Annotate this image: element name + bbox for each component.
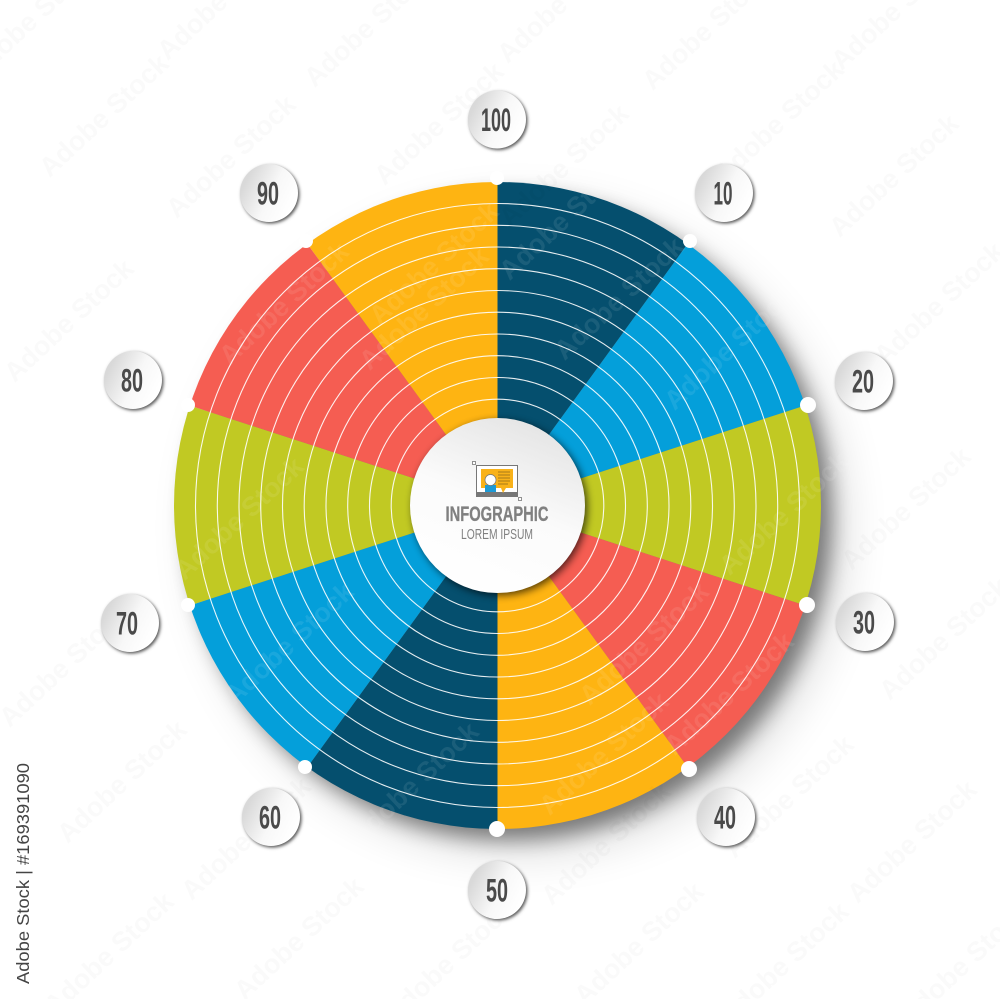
scale label 30: 30 bbox=[853, 604, 875, 640]
concentric ring lines bbox=[196, 204, 800, 808]
watermark pattern: Adobe Stock bbox=[353, 241, 495, 376]
watermark pattern: Adobe Stock bbox=[363, 196, 505, 331]
watermark pattern: Adobe Stock bbox=[218, 576, 360, 711]
segment 30-40: red bbox=[549, 532, 803, 763]
scale label 100: 100 bbox=[481, 102, 511, 138]
scale label 30 bbox=[836, 593, 896, 652]
hub subtitle: LOREM IPSUM bbox=[461, 526, 533, 543]
marker dots on rim bbox=[181, 171, 816, 837]
segment 20-30: green bbox=[580, 407, 821, 604]
wheel drop shadow bbox=[188, 196, 845, 853]
scale label 20: 20 bbox=[852, 364, 874, 400]
scale label 80 bbox=[104, 351, 164, 410]
watermark pattern on white: Adobe Stock bbox=[175, 771, 317, 906]
watermark pattern bbox=[168, 151, 855, 851]
icon: presenter on laptop screen bbox=[472, 462, 522, 500]
scale label 90: 90 bbox=[257, 176, 279, 212]
segment 10-20: blue bbox=[549, 246, 803, 478]
segment 80-90: red bbox=[192, 247, 446, 478]
watermark pattern: Adobe Stock bbox=[713, 446, 855, 581]
watermark pattern on white: Adobe Stock bbox=[0, 253, 140, 388]
watermark pattern: Adobe Stock bbox=[168, 451, 310, 586]
watermark pattern on white: Adobe Stock bbox=[718, 729, 860, 864]
scale label 70 bbox=[101, 594, 160, 654]
watermark pattern on white: Adobe Stock bbox=[823, 108, 965, 243]
center hub bbox=[410, 418, 588, 596]
scale label 70: 70 bbox=[116, 606, 138, 642]
watermark pattern on white: Adobe Stock bbox=[841, 774, 983, 909]
scale label 60 bbox=[242, 788, 302, 848]
watermark pattern on white: Adobe Stock bbox=[368, 56, 510, 191]
scale label 60: 60 bbox=[259, 800, 281, 836]
watermark pattern: Adobe Stock bbox=[548, 231, 690, 366]
scale label 50: 50 bbox=[486, 872, 508, 908]
watermark pattern on white: Adobe Stock bbox=[51, 714, 193, 849]
watermark pattern: Adobe Stock bbox=[573, 576, 715, 711]
watermark pattern on white: Adobe Stock bbox=[708, 54, 850, 189]
scale label 100 bbox=[468, 90, 528, 150]
watermark pattern: Adobe Stock bbox=[658, 281, 800, 416]
watermark pattern: Adobe Stock bbox=[343, 716, 485, 851]
segment 90-100: yellow bbox=[310, 182, 498, 435]
scale label 80: 80 bbox=[121, 362, 143, 398]
scale label 10: 10 bbox=[714, 176, 732, 212]
watermark pattern on white: Adobe Stock bbox=[160, 89, 302, 224]
scale label 20 bbox=[835, 352, 894, 412]
scale label 40 bbox=[697, 788, 756, 848]
watermark pattern on white: Adobe Stock bbox=[493, 98, 635, 233]
watermark pattern on white: Adobe Stock bbox=[535, 776, 677, 911]
watermark pattern: Adobe Stock bbox=[213, 236, 355, 371]
segment 100-10: dark blue bbox=[498, 182, 686, 435]
watermark pattern: Adobe Stock bbox=[658, 626, 800, 761]
segment 60-70: blue bbox=[192, 532, 446, 763]
stock credit: Adobe Stock | #169391090 bbox=[13, 763, 33, 984]
scale label 90 bbox=[240, 164, 300, 224]
scale label 40: 40 bbox=[714, 800, 736, 836]
segmented wheel chart bbox=[174, 182, 821, 829]
segment 70-80: green bbox=[174, 407, 414, 604]
hub title: INFOGRAPHIC bbox=[446, 503, 548, 526]
segment 50-60: dark blue bbox=[310, 576, 498, 829]
watermark pattern on white: Adobe Stock bbox=[835, 441, 977, 576]
watermark pattern: Adobe Stock bbox=[533, 686, 675, 821]
segment 40-50: yellow bbox=[498, 576, 684, 829]
watermark pattern on white: Adobe Stock bbox=[33, 48, 175, 183]
scale label 10 bbox=[695, 164, 754, 224]
watermark pattern: Adobe Stock bbox=[493, 151, 635, 286]
scale label 50 bbox=[468, 861, 528, 920]
